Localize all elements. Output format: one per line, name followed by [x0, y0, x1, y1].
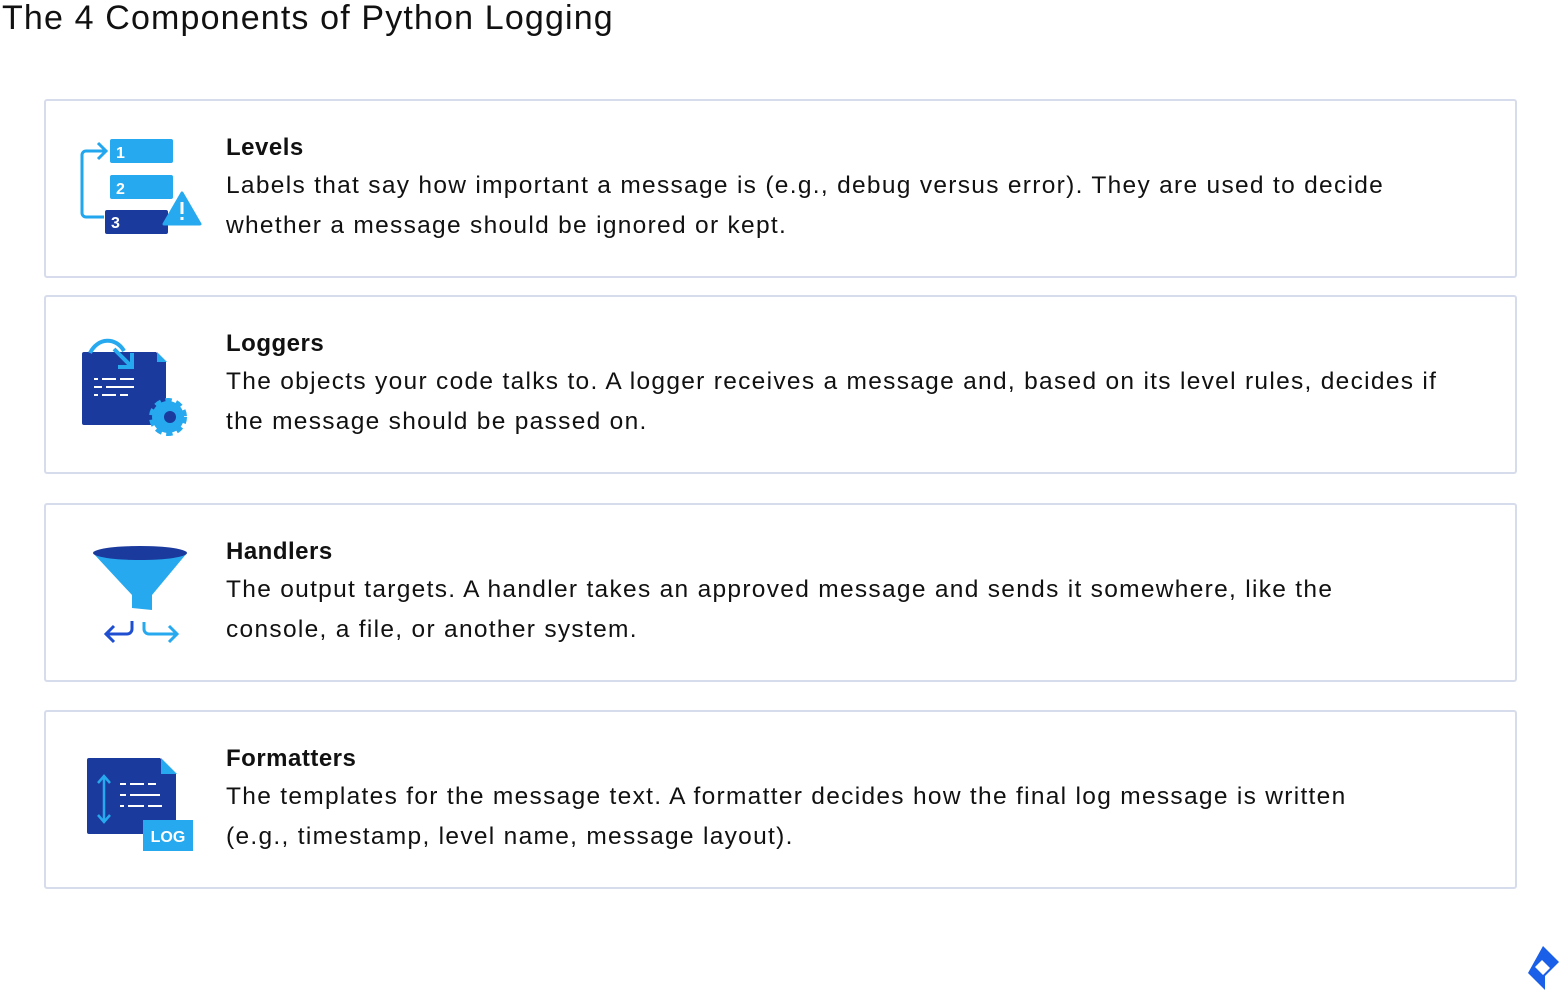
text: levels: Labels that say how important a message is (e.g., debug versus error). They are used to decide	[226, 172, 1384, 199]
panel: levels	[44, 99, 1517, 278]
text: levels: whether a message should be ignored or kept.	[226, 212, 787, 239]
icon: loggers	[82, 338, 187, 436]
text: formatters	[226, 745, 1347, 850]
panel: handlers	[44, 503, 1517, 682]
panel: loggers	[44, 295, 1517, 474]
text: formatters: (e.g., timestamp, level name, message layout).	[226, 823, 794, 850]
icon: levels: 1	[116, 145, 125, 162]
text: handlers: Handlers	[226, 538, 333, 565]
text: handlers	[226, 538, 1333, 643]
text: loggers	[226, 330, 1437, 435]
logo	[1528, 946, 1559, 990]
text: formatters: The templates for the message text. A formatter decides how the final log message is written	[226, 783, 1347, 810]
text: loggers: the message should be passed on.	[226, 408, 648, 435]
icon: formatters: LOG	[151, 829, 185, 846]
icon: levels	[80, 139, 202, 234]
icon: levels: 3	[111, 215, 120, 232]
icon: formatters	[87, 758, 193, 851]
text: formatters: Formatters	[226, 745, 356, 772]
text: levels	[226, 134, 1384, 239]
text: handlers: The output targets. A handler takes an approved message and sends it somewhere, like the	[226, 576, 1333, 603]
panel: formatters	[44, 710, 1517, 889]
title: The 4 Components of Python Logging	[2, 0, 614, 37]
icon: handlers	[93, 546, 187, 643]
text: handlers: console, a file, or another system.	[226, 616, 638, 643]
icon: levels: 2	[116, 181, 125, 198]
text: loggers: The objects your code talks to. A logger receives a message and, based on its level rules, decides if	[226, 368, 1437, 395]
text: levels: Levels	[226, 134, 304, 161]
text: loggers: Loggers	[226, 330, 324, 357]
